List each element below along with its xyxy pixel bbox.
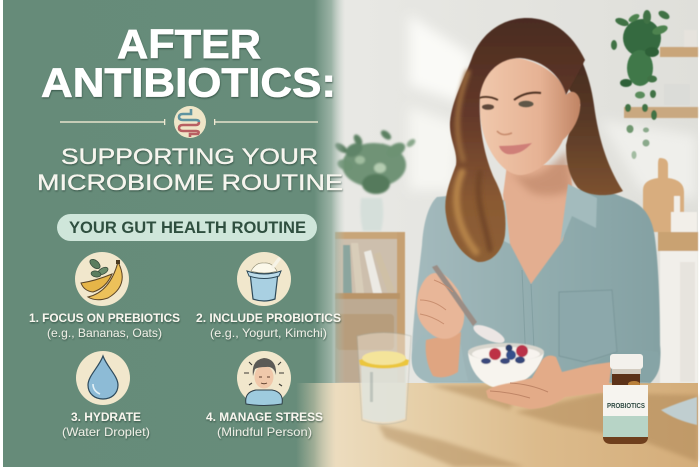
sunlight patches on wall bbox=[409, 15, 697, 200]
left plant with vase bbox=[333, 128, 417, 231]
subtitle bbox=[37, 144, 343, 195]
photo scene: sunlit room bbox=[333, 9, 698, 383]
wooden table bbox=[296, 383, 698, 467]
cutting board, jar and counter bbox=[643, 158, 698, 383]
item 1 label: 1. FOCUS ON PREBIOTICS bbox=[29, 311, 180, 325]
item 3 detail: (Water Droplet) bbox=[62, 425, 150, 439]
neck shadow bbox=[510, 150, 572, 196]
shirt and torso bbox=[412, 184, 661, 383]
neck and open collar bbox=[503, 165, 572, 284]
hair left and top bbox=[445, 18, 585, 262]
icon: yogurt cup bbox=[237, 252, 291, 306]
divider lines bbox=[60, 119, 318, 125]
title line one: AFTER bbox=[117, 21, 261, 67]
button placket bbox=[522, 270, 535, 370]
shirt pocket bbox=[559, 290, 617, 362]
icon: mindful person bbox=[237, 351, 291, 406]
section heading pill bbox=[57, 214, 317, 241]
bottle body bbox=[603, 385, 648, 444]
bookshelf bbox=[335, 232, 405, 383]
bottle label text: PROBIOTICS bbox=[607, 401, 645, 410]
left hand bbox=[417, 273, 464, 339]
item 4 detail: (Mindful Person) bbox=[217, 425, 312, 439]
icon: water droplet bbox=[76, 351, 130, 405]
left green panel background bbox=[3, 0, 345, 467]
title block bbox=[41, 21, 336, 106]
finger lines bbox=[490, 383, 548, 398]
right forearm and hand holding bowl bbox=[486, 356, 612, 409]
item 2 detail: (e.g., Yogurt, Kimchi) bbox=[210, 326, 327, 340]
bottle label bbox=[603, 385, 648, 416]
routine item 2: probiotics bbox=[196, 252, 341, 340]
left forearm bbox=[426, 332, 461, 377]
facial features bbox=[479, 93, 541, 154]
hair right side bbox=[560, 32, 623, 195]
napkin bbox=[661, 397, 697, 425]
left hand fingers over spoon bbox=[420, 280, 453, 324]
item 1 detail: (e.g., Bananas, Oats) bbox=[47, 326, 162, 340]
routine item 1: prebiotics bbox=[29, 252, 180, 340]
routine item 4: manage stress bbox=[206, 351, 323, 439]
bottle label lower band bbox=[603, 416, 648, 437]
left sleeve cuff bbox=[412, 335, 468, 382]
icon: intestine bbox=[174, 106, 206, 138]
bottle cap bbox=[610, 354, 643, 369]
yogurt bowl with berries bbox=[468, 343, 544, 389]
face bbox=[479, 58, 580, 175]
title line two: ANTIBIOTICS: bbox=[41, 60, 336, 106]
water glass with lemon bbox=[357, 332, 411, 424]
section heading pill: YOUR GUT HEALTH ROUTINE bbox=[69, 219, 306, 237]
spoon bbox=[432, 265, 507, 347]
subtitle line one: SUPPORTING YOUR bbox=[61, 144, 318, 169]
item 3 label: 3. HYDRATE bbox=[71, 410, 141, 424]
capsules bbox=[628, 381, 640, 387]
icon: banana and leaves bbox=[75, 252, 129, 306]
collar bbox=[497, 184, 597, 245]
woman bbox=[412, 18, 661, 409]
right shelves and hanging plant bbox=[611, 9, 698, 159]
item 4 label: 4. MANAGE STRESS bbox=[206, 410, 323, 424]
routine item 3: hydrate bbox=[62, 351, 150, 439]
right sleeve fold bbox=[590, 350, 660, 383]
probiotics bottle bbox=[603, 354, 648, 444]
subtitle line two: MICROBIOME ROUTINE bbox=[37, 170, 343, 195]
hair highlights bbox=[456, 72, 490, 252]
item 2 label: 2. INCLUDE PROBIOTICS bbox=[196, 311, 341, 325]
shadows on table bbox=[378, 385, 698, 467]
divider with gut icon bbox=[60, 106, 318, 138]
